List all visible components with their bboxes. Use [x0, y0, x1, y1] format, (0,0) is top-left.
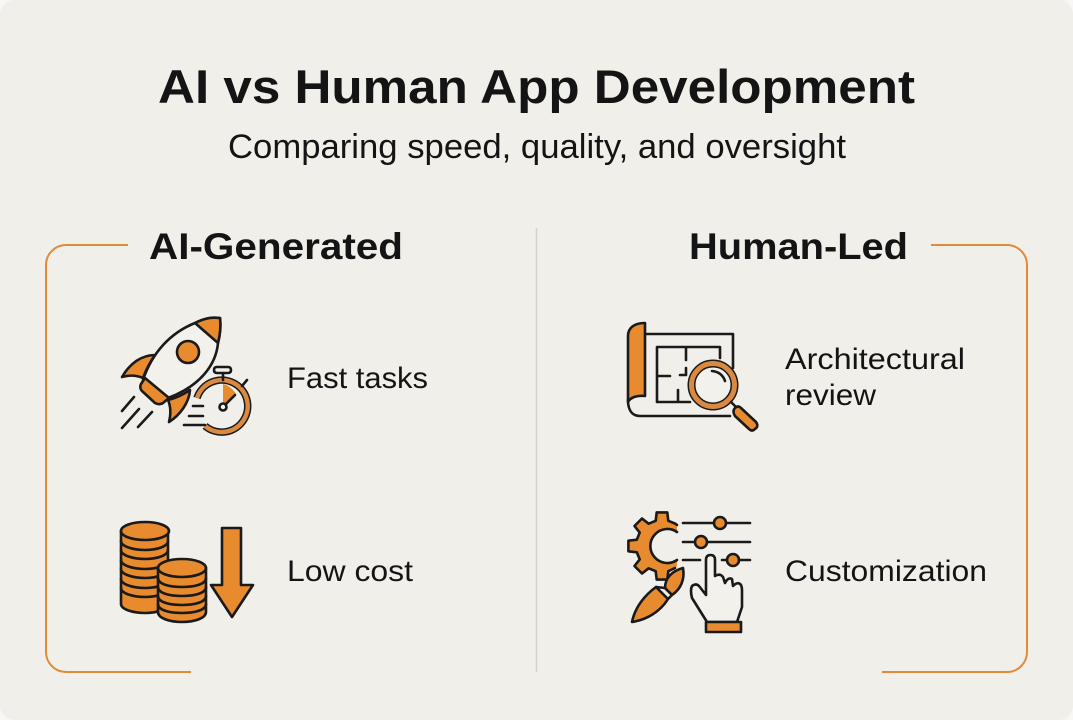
heading: AI-Generated: AI-Generated — [149, 226, 403, 267]
title: AI vs Human App Development — [158, 60, 915, 113]
label: Customization: Customization — [785, 555, 987, 588]
icon: coin stacks and down arrow — [121, 522, 253, 622]
label: Low cost: Low cost — [287, 555, 414, 588]
panel: AI-Generated — [46, 226, 428, 672]
panel frame: AI-Generated — [46, 245, 191, 672]
label: Architectural review: Architectural — [785, 343, 965, 376]
heading: Human-Led: Human-Led — [689, 226, 908, 267]
icon: rocket and stopwatch — [122, 318, 248, 432]
label: Architectural review: review — [785, 379, 876, 412]
icon: gear, sliders, brush and hand — [628, 512, 750, 632]
label: Fast tasks: Fast tasks — [287, 362, 428, 395]
icon: blueprint and magnifier — [628, 323, 757, 430]
center divider — [536, 228, 538, 672]
panel frame: Human-Led — [882, 245, 1027, 672]
panel: Human-Led — [628, 226, 1027, 672]
label: Architectural review — [785, 343, 965, 412]
subtitle: Comparing speed, quality, and oversight — [228, 128, 847, 166]
